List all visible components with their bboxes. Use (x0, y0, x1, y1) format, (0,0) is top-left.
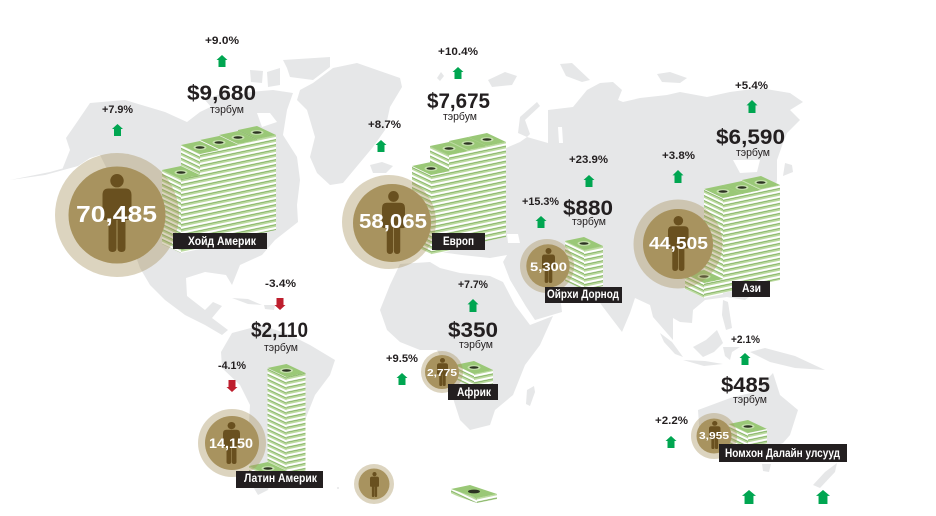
region: Middle East (520, 154, 622, 303)
value: $485: тэрбум (733, 394, 767, 406)
population circle: Asia: 44,505 (649, 233, 708, 253)
label: Africa: Африк (457, 387, 491, 399)
value: $2,110: $2,110 (251, 319, 308, 342)
value: $6,590: $6,590 (716, 126, 785, 149)
label: Oceania (719, 444, 847, 462)
label: Latin America: Латин Америк (244, 473, 317, 485)
population circle: Middle East: 5,300 (530, 260, 567, 274)
growth: +9.5%: +9.5% (386, 353, 418, 365)
growth: +8.7% (368, 119, 401, 152)
world map background (10, 57, 837, 495)
growth: +10.4% (438, 46, 478, 79)
value: $7,675: $7,675 (427, 90, 490, 113)
region: Latin America (198, 278, 323, 488)
region: Europe (342, 46, 506, 269)
growth: +2.1% (731, 334, 760, 365)
population circle: Europe (342, 175, 436, 269)
label: Europe (432, 233, 485, 250)
growth: +9.0% (205, 35, 239, 67)
money stack: Africa (455, 361, 493, 388)
value: $6,590 (716, 126, 785, 159)
growth: +3.8% (662, 150, 695, 183)
growth: +15.3%: +15.3% (522, 196, 559, 208)
growth: +23.9% (569, 154, 608, 187)
money stack: Middle East (565, 237, 603, 290)
value: $485: $485 (721, 374, 770, 397)
population circle: Latin America (198, 409, 266, 477)
value: $350: тэрбум (459, 339, 493, 351)
population circle: Oceania: 3,955 (699, 431, 730, 442)
growth: +7.9%: +7.9% (102, 104, 133, 116)
value: $2,110: тэрбум (264, 342, 298, 354)
population circle: North America: 70,485 (76, 201, 157, 227)
label: Asia (732, 281, 770, 297)
growth: +3.8%: +3.8% (662, 150, 695, 162)
population circle: Oceania (691, 413, 737, 459)
value: $880: тэрбум (572, 216, 606, 228)
region: North America (55, 35, 276, 277)
value: $880: $880 (563, 197, 613, 220)
value: $880 (563, 197, 613, 228)
region: Africa (386, 279, 498, 400)
growth: +9.0%: +9.0% (205, 35, 239, 47)
region: Oceania (655, 334, 847, 462)
population circle: Asia (634, 200, 722, 288)
legend icon: green arrow right (816, 490, 830, 504)
growth: -4.1%: -4.1% (218, 360, 246, 372)
value: $7,675: тэрбум (443, 111, 477, 123)
growth: +2.2%: +2.2% (655, 415, 688, 427)
growth: +5.4%: +5.4% (735, 80, 768, 92)
legend icon: person circle (354, 464, 394, 504)
growth: -3.4% (265, 278, 296, 310)
value: $485 (721, 374, 770, 406)
growth: -3.4%: -3.4% (265, 278, 296, 290)
value: $350 (448, 319, 498, 351)
legend icon: green arrow left (742, 490, 756, 504)
money stack: Oceania (729, 420, 767, 453)
value: $9,680 (187, 82, 256, 116)
population circle: Middle East (520, 239, 574, 293)
value: $9,680: тэрбум (210, 104, 244, 116)
label: Asia: Ази (742, 283, 761, 295)
label: Middle East (545, 287, 622, 303)
value: $9,680: $9,680 (187, 82, 256, 105)
money stack: North America (162, 126, 276, 253)
population circle: North America (55, 153, 179, 277)
value: $2,110 (251, 319, 308, 354)
label: Oceania: Номхон Далайн улсууд (725, 448, 841, 460)
legend icon: money bundle (451, 485, 497, 503)
money stack: Asia (685, 176, 780, 298)
growth: +23.9%: +23.9% (569, 154, 608, 166)
white inland seas (257, 113, 760, 323)
growth: +5.4% (735, 80, 768, 113)
label: North America: Хойд Америк (188, 236, 256, 248)
value: $350: $350 (448, 319, 498, 342)
label: Europe: Европ (443, 236, 474, 248)
growth: +2.1%: +2.1% (731, 334, 760, 346)
value: $7,675 (427, 90, 490, 123)
money stack: Latin America (249, 364, 306, 482)
label: North America (173, 233, 267, 249)
label: Latin America (236, 471, 323, 488)
population circle: Latin America: 14,150 (209, 435, 253, 451)
label: Middle East: Ойрхи Дорнод (547, 289, 620, 301)
region: Asia (634, 80, 785, 298)
growth: +8.7%: +8.7% (368, 119, 401, 131)
growth: +7.7%: +7.7% (458, 279, 488, 291)
value: $6,590: тэрбум (736, 147, 770, 159)
growth: +15.3% (522, 196, 559, 228)
population circle: Europe: 58,065 (359, 211, 427, 233)
growth: +10.4%: +10.4% (438, 46, 478, 58)
growth: -4.1% (218, 360, 246, 392)
population circle: Africa: 2,775 (427, 367, 457, 379)
growth: +2.2% (655, 415, 688, 448)
growth: +7.9% (102, 104, 133, 136)
money stack: Europe (412, 133, 506, 255)
